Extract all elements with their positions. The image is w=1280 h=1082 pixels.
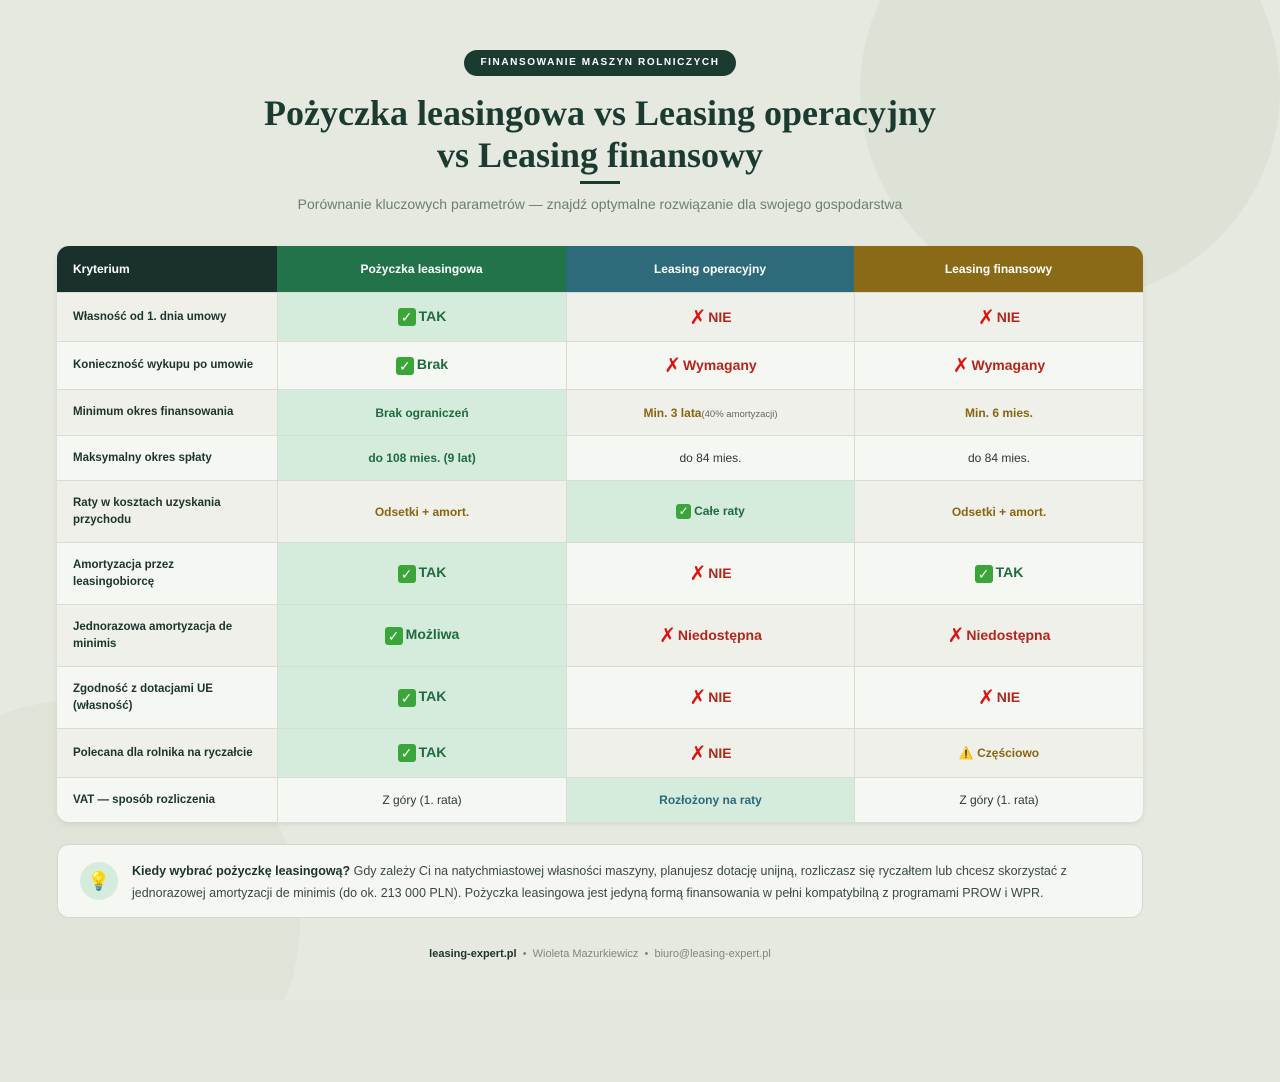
comparison table: Odsetki + amort. xyxy=(952,504,1046,518)
comparison table: TAK xyxy=(419,308,446,324)
badge: FINANSOWANIE MASZYN ROLNICZYCH xyxy=(480,57,720,68)
comparison table: ✓ xyxy=(679,504,689,518)
comparison table: ✗NIE xyxy=(689,306,732,328)
comparison table: VAT — sposób rozliczenia xyxy=(73,794,215,806)
comparison table: Min. 3 lata(40% amortyzacji) xyxy=(643,406,778,420)
comparison table: Brak ograniczeń xyxy=(375,406,469,420)
comparison table: Leasing operacyjny xyxy=(654,262,766,276)
comparison table: TAK xyxy=(419,688,446,704)
comparison table: ✗NIE xyxy=(689,687,732,709)
comparison table: Amortyzacja przez xyxy=(73,558,174,570)
comparison table: Maksymalny okres spłaty xyxy=(73,452,212,464)
comparison table: Możliwa xyxy=(406,626,459,642)
comparison table: ✗NIE xyxy=(689,563,732,585)
comparison table: ✓ xyxy=(401,309,412,325)
comparison table: ✗Wymagany xyxy=(664,355,757,377)
comparison table: TAK xyxy=(419,564,446,580)
comparison table: Minimum okres finansowania xyxy=(73,406,233,418)
badge xyxy=(464,50,736,76)
comparison table: Rozłożony na raty xyxy=(659,793,762,807)
comparison table: przychodu xyxy=(73,514,131,526)
icon: bulb: 💡 xyxy=(88,871,110,891)
comparison table: Z góry (1. rata) xyxy=(382,793,462,807)
title: vs Leasing finansowy xyxy=(437,135,763,175)
comparison table: Całe raty xyxy=(694,504,745,518)
comparison table: ⚠️ Częściowo xyxy=(959,746,1039,760)
comparison table: Własność od 1. dnia umowy xyxy=(73,310,226,322)
comparison table: do 84 mies. xyxy=(968,451,1030,465)
comparison table: ✗NIE xyxy=(689,742,732,764)
comparison table: ✗Wymagany xyxy=(953,355,1045,377)
title xyxy=(264,93,936,175)
comparison table: do 108 mies. (9 lat) xyxy=(368,451,476,465)
comparison table: ✓ xyxy=(399,358,411,374)
comparison table: Leasing finansowy xyxy=(945,262,1052,276)
subtitle: Porównanie kluczowych parametrów — znajdź optymalne rozwiązanie dla swojego gospodarstwa xyxy=(298,196,902,212)
comparison table: ✓ xyxy=(401,566,412,582)
comparison table xyxy=(57,246,1143,822)
comparison table: ✗NIE xyxy=(978,687,1020,709)
comparison table: Kryterium xyxy=(73,262,130,276)
comparison table: TAK xyxy=(419,744,446,760)
comparison table: ✗NIE xyxy=(978,306,1020,328)
comparison table: Konieczność wykupu po umowie xyxy=(73,359,253,371)
comparison table: ✓ xyxy=(388,628,400,644)
comparison table: ✓ xyxy=(978,566,989,582)
tip text: Kiedy wybrać pożyczkę leasingową? Gdy zależy Ci na natychmiastowej własności maszyny, planujesz dotację unijną, rozliczasz się ryczałtem lub chcesz skorzystać z jednorazowej amortyzacji de minimis (do ok. 213 000 PLN). Pożyczka leasingowa jest jedyną formą finansowania w pełni kompatybilną z programami PROW i WPR. xyxy=(132,864,1067,900)
comparison table: leasingobiorcę xyxy=(73,576,154,588)
comparison table: ✓ xyxy=(401,690,412,706)
comparison table: Min. 6 mies. xyxy=(965,406,1033,420)
comparison table: ✗Niedostępna xyxy=(948,625,1050,647)
comparison table: Jednorazowa amortyzacja de xyxy=(73,620,232,632)
comparison table: Zgodność z dotacjami UE xyxy=(73,682,213,694)
comparison table: ✓ xyxy=(401,745,412,761)
comparison table: Polecana dla rolnika na ryczałcie xyxy=(73,746,253,758)
comparison table: ✗Niedostępna xyxy=(659,625,762,647)
comparison table: minimis xyxy=(73,638,116,650)
comparison table: do 84 mies. xyxy=(679,451,742,465)
tip callout xyxy=(57,844,1143,918)
comparison table: Raty w kosztach uzyskania xyxy=(73,496,221,508)
icon: bulb xyxy=(80,862,118,900)
title: Pożyczka leasingowa vs Leasing operacyjny xyxy=(264,93,936,133)
comparison table: Z góry (1. rata) xyxy=(959,793,1039,807)
comparison table: (własność) xyxy=(73,700,132,712)
footer: leasing-expert.pl • Wioleta Mazurkiewicz • biuro@leasing-expert.pl xyxy=(429,948,771,960)
comparison table: Pożyczka leasingowa xyxy=(360,262,483,276)
comparison table: Brak xyxy=(417,356,448,372)
comparison table: Odsetki + amort. xyxy=(375,504,469,518)
comparison table: TAK xyxy=(996,564,1023,580)
